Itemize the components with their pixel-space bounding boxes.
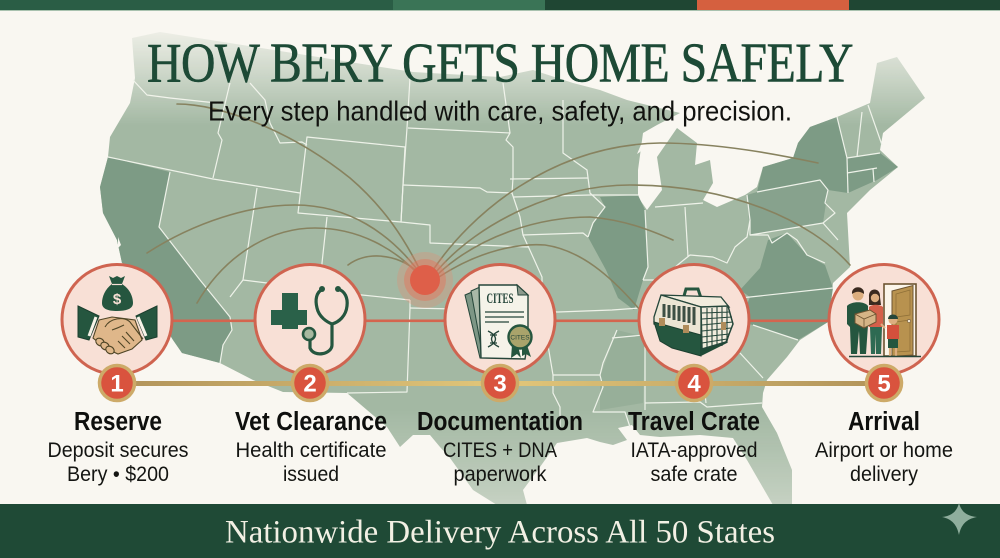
- step description: [48, 438, 188, 486]
- icon: sparkle: [942, 503, 977, 535]
- delivery route arcs: [147, 104, 850, 310]
- step number 1: [100, 366, 134, 400]
- footer text: Nationwide Delivery Across All 50 States: [225, 514, 775, 550]
- step description: [236, 438, 386, 486]
- step 1: reserve: [48, 264, 188, 486]
- step description: Airport or home: [815, 438, 953, 462]
- step 3: documentation: [417, 264, 583, 486]
- origin pulse: [397, 252, 453, 308]
- map of the United States: [100, 32, 925, 505]
- step number 2: 2: [303, 370, 317, 398]
- step description: Health certificate: [236, 438, 386, 462]
- step description: [815, 438, 953, 486]
- step number 3: 3: [493, 370, 507, 398]
- step description: [443, 438, 558, 486]
- step heading: Vet Clearance: [235, 408, 387, 436]
- step description: Bery • $200: [67, 462, 169, 486]
- step description: CITES + DNA: [443, 438, 558, 462]
- icon: family at the front door: [829, 264, 939, 374]
- step number 1: 1: [110, 370, 124, 398]
- step heading: Travel Crate: [628, 408, 760, 436]
- step description: delivery: [850, 462, 918, 486]
- step number 4: [676, 366, 712, 400]
- step description: Deposit secures: [48, 438, 188, 462]
- step description: IATA-approved: [630, 438, 758, 462]
- icon: pet travel crate: [639, 264, 749, 374]
- step heading: Arrival: [848, 408, 920, 436]
- subtitle: Every step handled with care, safety, and precision.: [208, 96, 792, 127]
- title: HOW BERY GETS HOME SAFELY: [147, 32, 853, 94]
- step number 2: [292, 366, 328, 400]
- step number 3: [482, 366, 518, 400]
- step heading: Documentation: [417, 408, 583, 436]
- icon: CITES paperwork: [445, 264, 555, 374]
- icon: handshake and money bag: [62, 264, 172, 374]
- gold timeline: [117, 381, 884, 386]
- step 2: vet clearance: [235, 264, 387, 486]
- step description: issued: [283, 462, 339, 486]
- step description: safe crate: [650, 462, 738, 486]
- step number 5: [866, 366, 902, 400]
- step 4: travel crate: [628, 264, 760, 486]
- step description: paperwork: [454, 462, 547, 486]
- step number 4: 4: [687, 370, 701, 398]
- icon: CITES paperwork: CITES: [486, 291, 514, 307]
- red connector line: [117, 320, 884, 322]
- step description: [630, 438, 758, 486]
- icon: medical cross and stethoscope: [255, 264, 365, 374]
- step heading: Reserve: [74, 408, 162, 436]
- lake and coastal details: [118, 140, 646, 248]
- footer band: [0, 504, 1000, 558]
- step number 5: 5: [877, 370, 891, 398]
- step 5: arrival: [815, 264, 953, 486]
- icon: handshake and money bag: $: [113, 291, 122, 308]
- top colour bar: [0, 0, 1000, 11]
- icon: CITES paperwork: CITES: [510, 334, 530, 342]
- darker states: [100, 117, 898, 410]
- state borders: [108, 78, 882, 430]
